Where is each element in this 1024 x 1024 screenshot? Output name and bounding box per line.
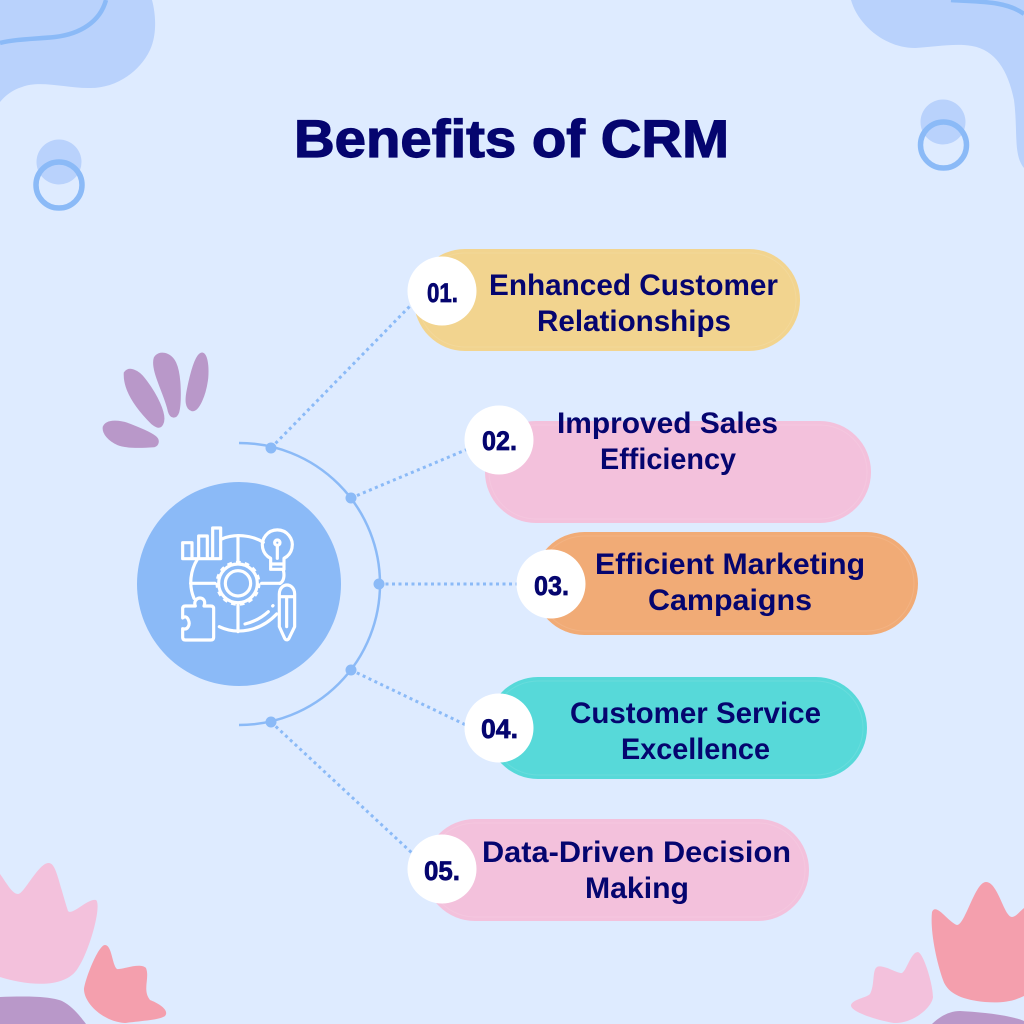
pill (533, 532, 918, 635)
label: Efficiency (600, 443, 736, 476)
decoration: bottom-left shapes (0, 863, 166, 1024)
number: 03. (534, 571, 569, 601)
number badge (408, 256, 476, 326)
label: Campaigns (648, 584, 812, 617)
pill (414, 249, 800, 351)
number: 01. (427, 278, 458, 308)
label: Enhanced Customer (489, 269, 778, 302)
benefit 05 (408, 819, 809, 921)
decoration: top-left blob (0, 0, 155, 102)
pill (485, 421, 871, 523)
label: Making (585, 872, 689, 905)
label: Relationships (537, 305, 731, 338)
label: Efficient Marketing (595, 548, 865, 581)
number badge (464, 694, 534, 762)
label: Customer Service (570, 697, 821, 730)
number: 05. (424, 856, 460, 886)
benefit 01 (408, 249, 800, 351)
decoration: bottom-right shapes (851, 882, 1024, 1024)
number badge (516, 550, 586, 618)
pill (424, 819, 809, 921)
number: 02. (482, 426, 517, 456)
decoration: purple leaves (104, 354, 207, 447)
benefit 02 (464, 406, 871, 523)
number: 04. (481, 714, 518, 744)
central icon: strategy tools (137, 482, 341, 686)
connector arc with dotted lines (239, 304, 518, 853)
pill (487, 677, 867, 779)
decoration: top-right blob (851, 0, 1024, 168)
label: Excellence (621, 733, 770, 766)
decoration: left circles (36, 140, 82, 208)
decoration: right circles (920, 100, 966, 168)
benefit 04 (464, 677, 867, 779)
label: Data-Driven Decision (482, 836, 791, 869)
number badge (408, 834, 476, 904)
number badge (464, 406, 534, 474)
label: Improved Sales (557, 407, 778, 440)
benefit 03 (516, 532, 918, 635)
title: Benefits of CRM (294, 110, 729, 169)
